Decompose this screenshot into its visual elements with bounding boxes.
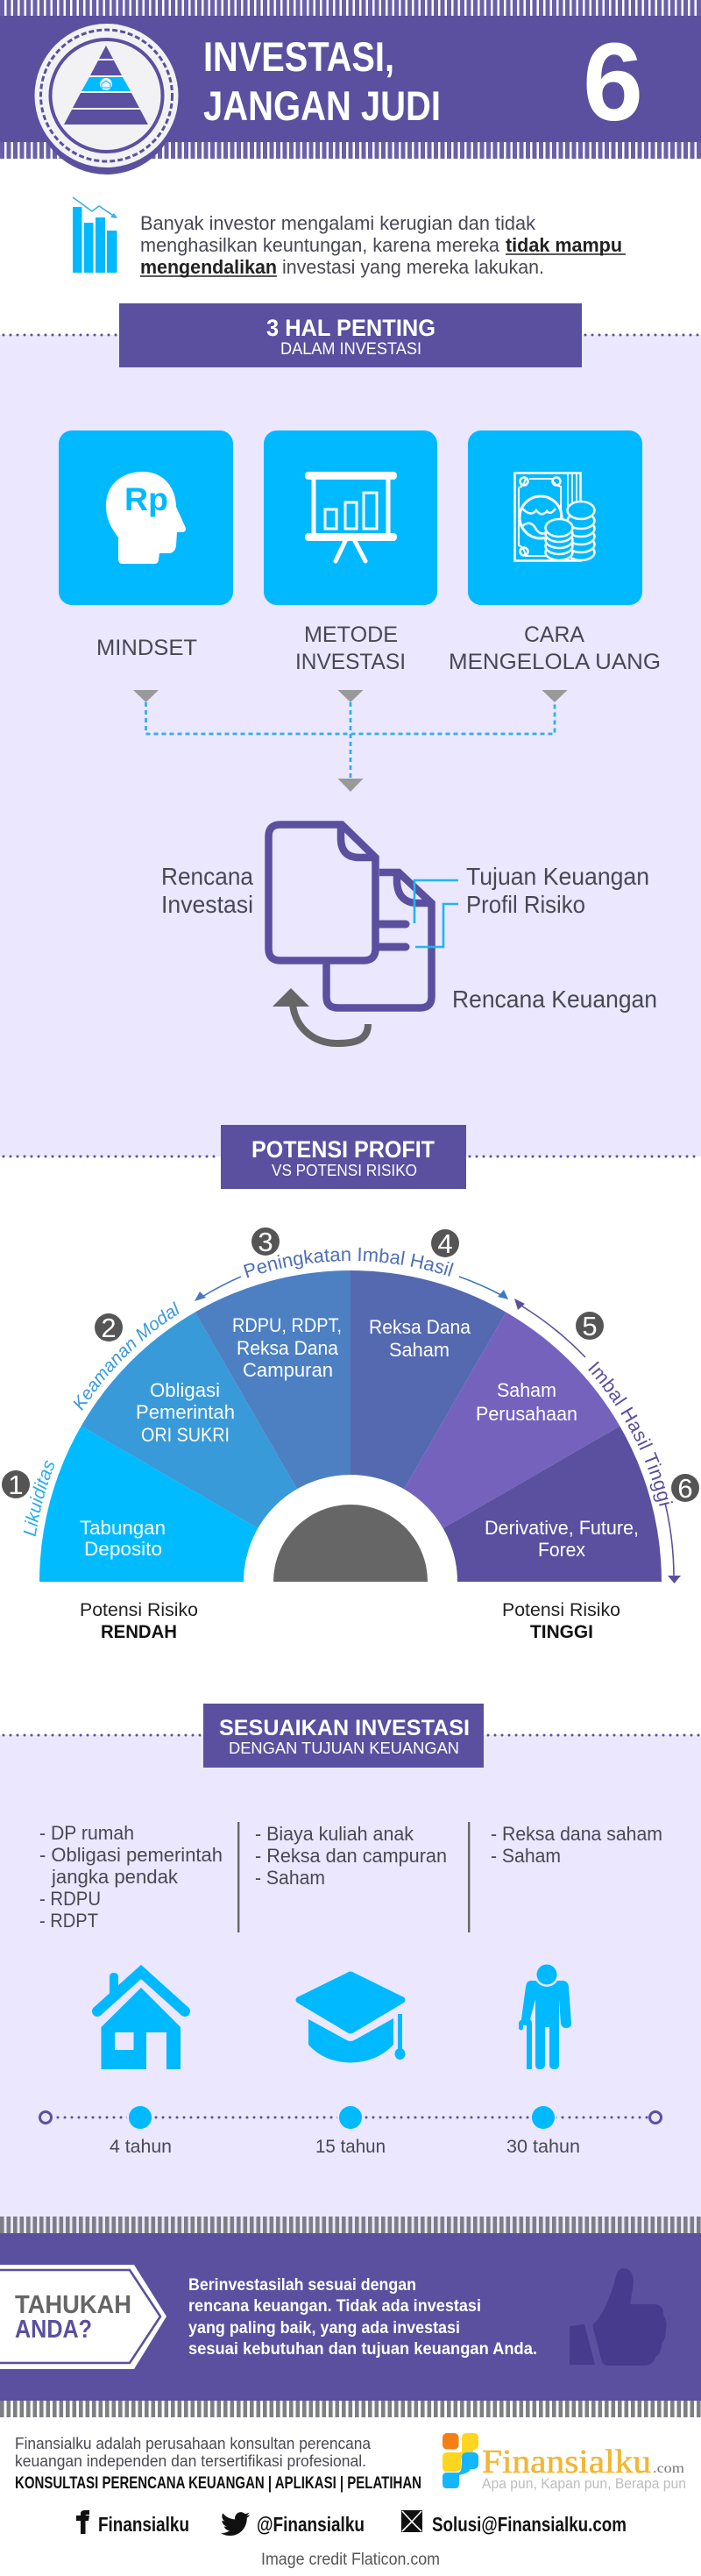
risk label: high: Potensi Risiko [502,1600,620,1620]
labels: three cards: MENGELOLA UANG [449,650,661,674]
segment labels [80,1314,639,1561]
segment labels: Perusahaan [476,1403,577,1425]
labels: three cards [96,623,661,674]
risk label: low [80,1600,198,1642]
segment: obligasi [81,1313,350,1582]
footer: company description: Finansialku adalah perusahaan konsultan perencana [15,2435,372,2452]
segment labels: Tabungan [80,1517,166,1539]
segment: derivative [350,1426,662,1582]
icon: graduation cap [296,1971,405,2062]
segment labels: Saham [389,1339,450,1361]
lavender panel: sesuaikan investasi [0,1735,701,2217]
list: 4 tahun instruments: jangka pendak [51,1866,179,1888]
social: facebook: Finansialku [98,2513,189,2536]
arrows: connector to plan [133,690,568,792]
callout badge: TAHUKAH [15,2291,131,2319]
timeline: 30 tahun [506,2137,580,2157]
numbered badges: 6 [677,1473,693,1504]
curved labels around chart: Keamanan Modal [74,1301,179,1411]
callout badge [0,2265,166,2369]
labels: three cards: MINDSET [96,636,197,660]
list: 30 tahun instruments: - Saham [491,1845,561,1867]
section heading: 3 hal penting: DALAM INVESTASI [280,340,421,359]
section heading: sesuaikan investasi: DENGAN TUJUAN KEUANGAN [229,1740,459,1757]
curved labels around chart [23,1248,673,1536]
card: cara mengelola uang icon [468,431,642,605]
timeline [40,2104,661,2157]
section heading: sesuaikan investasi [4,1704,701,1768]
lavender panel: 3 hal penting [0,335,701,1156]
list: 30 tahun instruments [491,1823,662,1867]
icon: thumbs up [570,2268,667,2366]
list: 15 tahun instruments: - Biaya kuliah anak [255,1823,414,1845]
numbered badges: 2 [101,1313,117,1343]
intro text: mengendalikan [140,256,277,278]
callout text: rencana keuangan. Tidak ada investasi [188,2296,481,2316]
title: INVESTASI, [203,33,394,80]
list: 4 tahun instruments: - DP rumah [39,1822,134,1844]
arrow: cycle [273,988,368,1043]
callout text: sesuai kebutuhan dan tujuan keuangan Anda. [188,2339,537,2359]
header banner [0,0,701,174]
arrows around chart [195,1277,681,1583]
callout text [188,2275,537,2359]
labels: three cards: CARA [524,623,584,647]
numbered badges: 4 [437,1228,453,1259]
card: mindset icon [59,431,233,605]
timeline: 15 tahun [315,2137,386,2157]
segment labels: Obligasi [150,1379,220,1401]
section heading: potensi profit [4,1125,701,1189]
callout text: yang paling baik, yang ada investasi [188,2318,460,2338]
panel: tahukah anda [0,2217,701,2417]
numbered badges: 5 [582,1311,598,1341]
social: email [401,2510,627,2536]
risk label: high [502,1600,620,1642]
social: twitter [221,2512,365,2536]
segment labels: Deposito [84,1538,162,1560]
inner white ring [244,1475,457,1582]
logo: finansialku: Finansialku [482,2444,651,2480]
segment labels: Pemerintah [136,1401,235,1423]
footer: company description [15,2435,421,2493]
list: 30 tahun instruments: - Reksa dana saham [491,1823,662,1845]
segment labels: Derivative, Future, [485,1517,639,1539]
list: 15 tahun instruments [255,1823,447,1889]
curved labels around chart: Likuiditas [23,1461,54,1536]
number 6: 6 [583,20,643,144]
intro text: tidak mampu [506,234,622,256]
intro text: investasi yang mereka lakukan. [282,256,544,278]
icon: two documents [268,824,458,1008]
logo: finansialku: .com [653,2461,685,2476]
list: 15 tahun instruments: - Reksa dan campuran [255,1845,447,1867]
segment labels: Saham [497,1379,556,1401]
social: facebook [76,2510,189,2536]
list: 4 tahun instruments [39,1822,223,1932]
risk label: high: TINGGI [530,1622,593,1642]
segment labels: Campuran [243,1359,333,1381]
icon: house [97,1972,185,2069]
segment: reksa dana saham [350,1270,506,1582]
logo: finansialku: Apa pun, Kapan pun, Berapa pun [482,2475,686,2492]
section heading: potensi profit: VS POTENSI RISIKO [272,1162,417,1179]
section heading: potensi profit: POTENSI PROFIT [251,1136,435,1163]
logo: finansialku [443,2433,686,2492]
risk label: low: Potensi Risiko [80,1600,198,1620]
labels: document: Tujuan Keuangan [466,863,649,890]
intro text [140,212,626,278]
image credit: Image credit Flaticon.com [261,2551,440,2569]
list: 4 tahun instruments: - RDPU [39,1888,101,1910]
segment labels: Reksa Dana [237,1337,339,1359]
inner gray half circle [273,1505,428,1582]
risk label: low: RENDAH [101,1622,177,1642]
section heading: sesuaikan investasi: SESUAIKAN INVESTASI [219,1716,470,1740]
segment labels: Reksa Dana [369,1316,471,1338]
callout badge: ANDA? [15,2316,92,2344]
section heading: 3 hal penting [4,303,701,367]
list: 15 tahun instruments: - Saham [255,1867,325,1889]
numbered badges [2,1227,699,1504]
numbered badges: 3 [258,1227,273,1257]
card: mindset icon: Rp [124,481,168,517]
social: twitter: @Finansialku [257,2513,365,2536]
segment labels: ORI SUKRI [141,1424,230,1446]
segment: tabungan deposito [39,1426,350,1582]
timeline: 4 tahun [110,2137,172,2157]
numbered badges: 1 [8,1469,24,1500]
chart: risk return semicircle [39,1270,662,1582]
social: email: Solusi@Finansialku.com [432,2513,627,2536]
labels: document [161,863,657,1013]
segment: saham perusahaan [350,1313,620,1582]
curved labels around chart: Peningkatan Imbal Hasil [244,1248,454,1278]
curved labels around chart: Imbal Hasil Tinggi [588,1361,673,1506]
segment: rdpu rdpt [195,1270,350,1582]
segment labels: RDPU, RDPT, [232,1314,342,1336]
intro text: Banyak investor mengalami kerugian dan tidak [140,212,536,234]
intro text: menghasilkan keuntungan, karena mereka [140,234,500,256]
footer: company description: KONSULTASI PERENCANA KEUANGAN | APLIKASI | PELATIHAN [15,2474,421,2493]
list: 4 tahun instruments: - Obligasi pemerintah [39,1844,223,1866]
labels: document: Investasi [161,891,253,918]
title [203,33,441,129]
labels: document: Rencana Keuangan [452,986,657,1013]
section heading: 3 hal penting: 3 HAL PENTING [266,315,435,341]
labels: document: Rencana [161,863,253,890]
title: JANGAN JUDI [203,82,441,129]
header badge: pyramid [35,24,179,174]
card: metode investasi icon [264,431,437,605]
callout text: Berinvestasilah sesuai dengan [188,2275,416,2295]
icon: falling bar chart [73,197,117,273]
icon: elderly person [519,1962,571,2069]
labels: three cards: METODE [304,623,398,647]
segment labels: Forex [538,1539,585,1561]
footer: company description: keuangan independen dan tersertifikasi profesional. [15,2452,366,2470]
labels: three cards: INVESTASI [295,650,406,674]
labels: document: Profil Risiko [466,891,585,918]
list: 4 tahun instruments: - RDPT [39,1910,98,1932]
